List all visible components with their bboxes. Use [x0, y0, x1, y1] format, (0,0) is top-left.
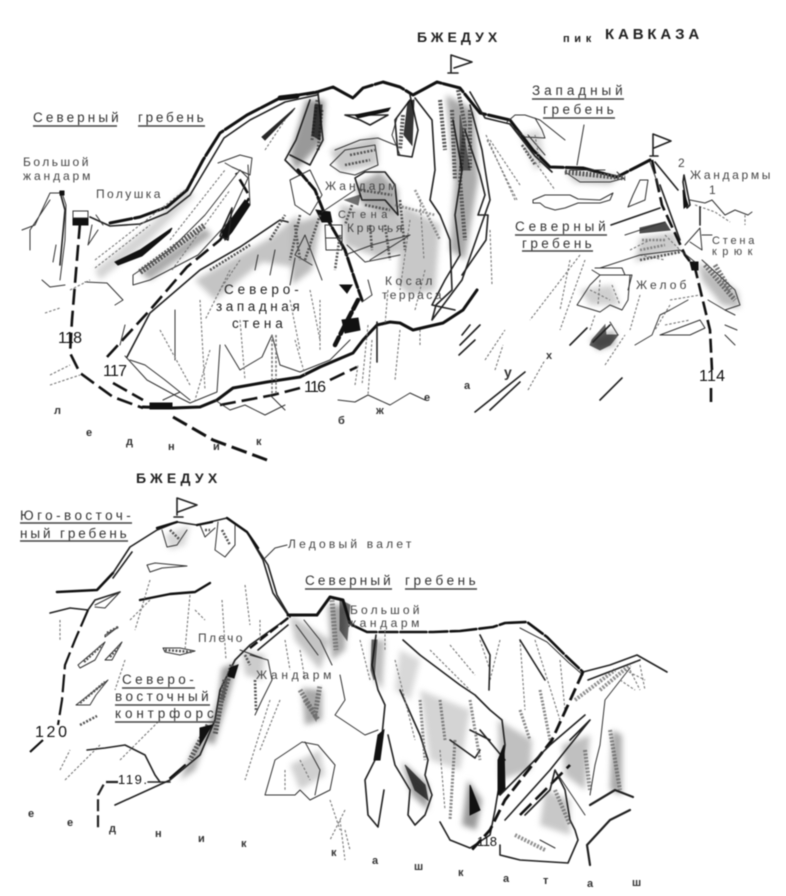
text: ice wall with leader: Ледовый валет: [288, 537, 412, 551]
text: North-west wall: стена: [232, 316, 284, 331]
text: glacier name letters: ж: [375, 405, 384, 417]
text: glacier name letters: у: [504, 364, 512, 380]
text: Kashkatash glacier letters: ш: [414, 861, 423, 873]
hut markers: [73, 211, 172, 409]
text: glacier name letters: х: [546, 350, 553, 362]
Kashkatash route dashes and glacier: [470, 660, 645, 865]
north-west wall outline: [125, 215, 350, 403]
text: Polushka: Полушка: [96, 187, 161, 201]
heading: Peak Kavkaza: [563, 26, 700, 45]
text: Kashkatash glacier letters: е: [67, 817, 73, 829]
text: central labels: Крючья: [347, 221, 403, 235]
south-east ridge and route 120: [30, 563, 250, 830]
text: central labels: [325, 179, 442, 302]
text: south-east ridge: [20, 508, 132, 541]
text: north ridge lower: [305, 573, 477, 589]
heading: Bzhedukh: БЖЕДУХ: [417, 29, 498, 45]
north-east buttress route: [115, 618, 332, 805]
upper rock faces: [322, 95, 418, 262]
text: Kashkatash glacier letters: к: [331, 847, 337, 859]
text: North-west wall: западная: [216, 299, 301, 314]
text: glacier name letters: е: [86, 427, 92, 439]
text: Great Gendarme: [23, 155, 91, 183]
text: Kashkatash glacier letters: н: [155, 828, 162, 840]
text: Kashkatash glacier letters: к: [241, 838, 247, 850]
text: south-east ridge: ный гребень: [20, 526, 128, 541]
north ridge rock strips: [45, 108, 295, 385]
text: central labels: терраса: [382, 288, 442, 302]
text: Great Gendarme lower: [348, 603, 420, 630]
text: shoulder: Плечо: [198, 631, 243, 645]
text: Kashkatash glacier letters: д: [109, 823, 116, 835]
text: Great Gendarme lower: Большой: [350, 603, 420, 617]
text: Kashkatash glacier letters: ш: [632, 877, 641, 889]
route 116 line: [143, 290, 477, 408]
text: west ridge: Западный: [532, 83, 624, 98]
text: central labels: Жандарм: [325, 179, 397, 193]
text: gendarmes: Жандармы: [690, 168, 771, 182]
route numbers lower: 118: [477, 834, 497, 849]
text: glacier name letters: е: [424, 392, 430, 404]
lower main ridge: [57, 518, 667, 675]
panel: north-west view of Bzhedukh and Peak Kavkaza: [22, 26, 771, 460]
route 114 dashed: [652, 160, 712, 402]
text: Kashkatash glacier letters: е: [28, 808, 34, 820]
route numbers lower: [35, 724, 497, 849]
route 117 dashed: [107, 173, 250, 357]
text: Great Gendarme lower: жандарм: [348, 616, 420, 630]
route numbers: 117: [103, 363, 127, 380]
text: north ridge lower: Северный: [305, 573, 392, 588]
text: west ridge: [532, 83, 624, 118]
text: north ridge lower: гребень: [405, 573, 477, 588]
text: Kashkatash glacier letters: а: [503, 873, 510, 885]
text: glacier name letters: д: [126, 436, 133, 448]
text: north ridge right: гребень: [522, 236, 593, 251]
route numbers lower: 120: [35, 724, 67, 741]
icon: summit flag Bzhedukh: [448, 55, 472, 73]
text: central labels: Стена: [338, 209, 388, 221]
route 118 dashed: [70, 223, 143, 408]
text: Kashkatash glacier letters: т: [543, 875, 549, 887]
route 116 dashed: [220, 367, 357, 405]
route 117 lower dash: [113, 383, 143, 400]
text: glacier name letters: к: [256, 436, 262, 448]
central buttress with dark rocks: [285, 93, 372, 345]
route numbers: 116: [304, 379, 326, 396]
text: north-east buttress: контрфорс: [115, 706, 215, 721]
text: Kashkatash glacier letters: и: [198, 833, 205, 845]
text: North ridge left: [33, 110, 205, 126]
text: Kashkatash glacier letters: к: [458, 867, 464, 879]
summit rock faces: [162, 522, 235, 557]
icon: summit flag lower: [174, 498, 197, 517]
Great Gendarme outline left: [22, 191, 66, 287]
text: hook wall: [712, 235, 755, 258]
text: glacier name letters: б: [338, 415, 345, 427]
text: Great Gendarme: Большой: [23, 155, 89, 169]
text: gendarmes: 1: [709, 183, 716, 197]
text: North ridge left: гребень: [138, 110, 205, 125]
heading: Peak Kavkaza: пик: [563, 33, 592, 45]
text: glacier name letters: [54, 350, 553, 453]
heading: Peak Kavkaza: КАВКАЗА: [605, 26, 700, 43]
shaded rock tone: [95, 95, 740, 835]
west ridge rocks: [487, 115, 648, 210]
text: gendarmes: [678, 156, 771, 197]
north ridge of Kavkaza with leader: [530, 162, 680, 330]
Bzhedukh summit face: [385, 90, 520, 325]
route on glacier dashed: [173, 417, 267, 460]
text: Kashkatash glacier letters: а: [372, 855, 379, 867]
text: west ridge: гребень: [543, 102, 615, 117]
text: gendarme lower: Жандарм: [256, 668, 332, 682]
text: north-east buttress: Северо-: [122, 672, 195, 687]
text: hook wall: Стена: [712, 235, 755, 247]
text: glacier name letters: а: [464, 380, 471, 392]
text: central labels: Косал: [385, 274, 433, 288]
text: north ridge right: [515, 219, 607, 251]
text: Kashkatash glacier letters: [28, 808, 641, 890]
text: gendarmes: 2: [678, 156, 685, 170]
gullies and ribs: [340, 630, 565, 860]
route numbers: 118: [58, 330, 82, 347]
text: ice wall with leader: [263, 537, 412, 560]
text: North ridge left: Северный: [33, 110, 120, 125]
text: Kashkatash glacier letters: а: [587, 878, 594, 890]
glacier cracks left: [130, 322, 425, 415]
route numbers: 114: [699, 368, 725, 385]
text: glacier name letters: н: [168, 441, 175, 453]
main ridge line: [90, 82, 650, 226]
panel: north-east view of Bzhedukh: [20, 470, 667, 890]
text: North-west wall: [216, 282, 301, 331]
text: glacier name letters: и: [213, 441, 220, 453]
route numbers lower: 119.: [118, 772, 147, 787]
text: hook wall: крюк: [712, 246, 753, 258]
route numbers: [58, 330, 725, 396]
text: north-east buttress: восточный: [115, 689, 210, 704]
text: south-east ridge: Юго-восточ-: [20, 508, 132, 523]
text: North-west wall: Северо-: [224, 282, 300, 297]
text: north-east buttress: [115, 672, 215, 722]
lower mid rock faces: [265, 675, 378, 840]
text: gully: Желоб: [636, 278, 687, 292]
text: glacier name letters: л: [54, 405, 61, 417]
icon: summit flag Peak Kavkaza: [650, 134, 671, 156]
text: Great Gendarme: жандарм: [23, 169, 91, 183]
heading: Bzhedukh lower: БЖЕДУХ: [136, 470, 218, 486]
text: north ridge right: Северный: [515, 219, 607, 234]
right side cliffs and gendarmes: [420, 175, 752, 412]
